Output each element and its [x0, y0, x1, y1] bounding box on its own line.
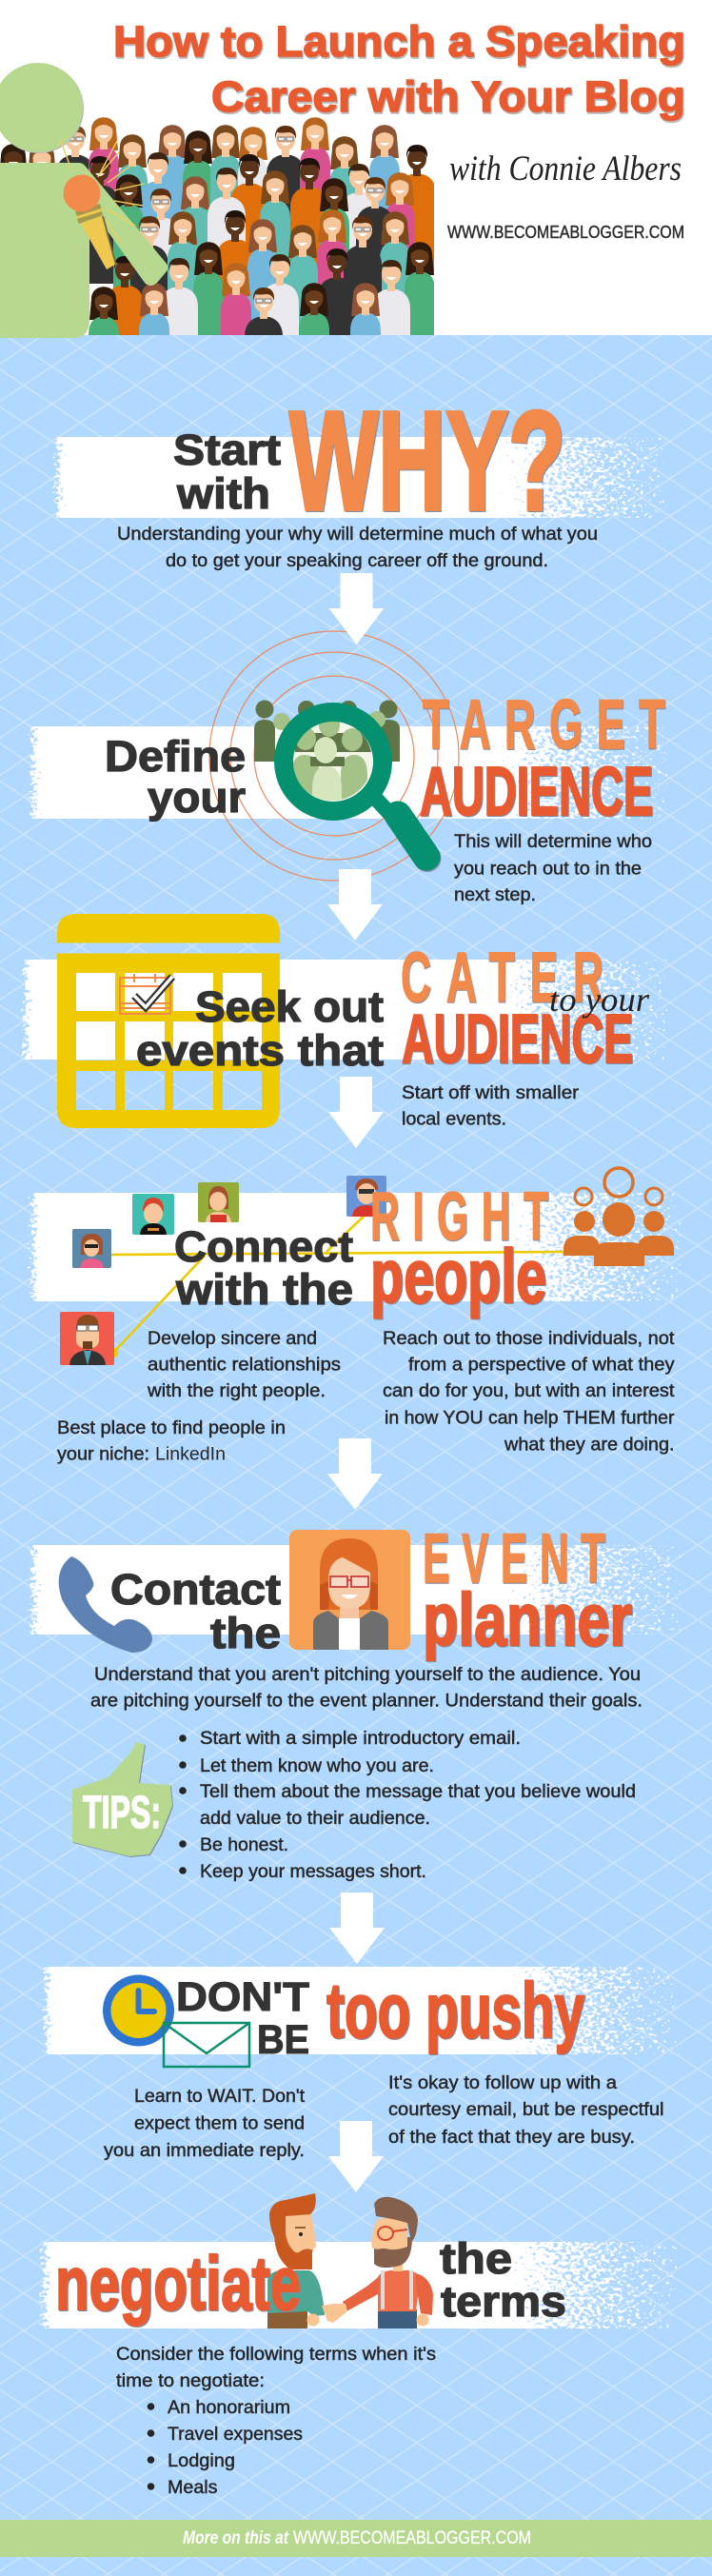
section 6 left text — [104, 2087, 306, 2161]
negotiation terms list: Travel expenses — [168, 2425, 303, 2445]
section 4 right text: in how YOU can help THEM further — [385, 1409, 675, 1428]
website: WWW.BECOMEABLOGGER.COM — [447, 223, 684, 242]
event planner portrait — [289, 1530, 410, 1650]
speaker silhouette with microphone — [0, 63, 168, 338]
section 4 niche text — [57, 1418, 286, 1464]
section 3 text: local events. — [402, 1110, 506, 1129]
section 3 text — [402, 1083, 580, 1129]
heading: the terms: terms — [441, 2277, 566, 2326]
negotiation terms list — [148, 2398, 303, 2498]
section 4 left text: authentic relationships — [148, 1356, 341, 1375]
arrow 3 — [328, 1077, 384, 1148]
heading: don't be: DON'T — [176, 1974, 309, 2020]
heading: connect with the: with the — [175, 1265, 353, 1314]
icon: clock — [103, 1974, 174, 2047]
section 4 niche text: Best place to find people in — [57, 1418, 286, 1438]
section 7 text: time to negotiate: — [116, 2371, 265, 2391]
heading: contact the: the — [210, 1609, 281, 1657]
script: to your: to your — [549, 981, 650, 1019]
section 6 left text: you an immediate reply. — [104, 2141, 305, 2161]
heading: connect with the — [174, 1222, 353, 1314]
section 5 text: are pitching yourself to the event planner. Understand their goals. — [90, 1691, 643, 1712]
connection lines — [103, 1210, 564, 1357]
icon: telephone — [59, 1556, 152, 1653]
heading: define your — [105, 732, 246, 822]
calendar icon — [57, 914, 280, 1128]
section 4 left text: Develop sincere and — [148, 1329, 317, 1349]
arrow 2 — [327, 869, 383, 941]
negotiation terms list: Lodging — [168, 2451, 235, 2471]
heading: define your: Define — [105, 732, 246, 781]
section 6 left text: expect them to send — [134, 2113, 305, 2134]
heading: EVENT: EVENT — [423, 1519, 605, 1597]
heading: contact the — [110, 1565, 281, 1657]
section 3 banner — [20, 960, 667, 1060]
magnifier over audience — [254, 701, 427, 859]
illustration: two men shaking hands — [267, 2193, 433, 2328]
icon: group of people — [564, 1168, 674, 1266]
section 4 left text: with the right people. — [147, 1381, 326, 1401]
heading: start with: Start — [173, 426, 281, 474]
thumbs-up tips icon — [72, 1742, 172, 1856]
heading: RIGHT: RIGHT — [370, 1179, 548, 1255]
section 4 right text — [383, 1329, 675, 1455]
heading: contact the: Contact — [110, 1565, 281, 1614]
title: How to Launch a Speaking — [113, 17, 685, 66]
section 4 right text: what they are doing. — [504, 1436, 674, 1455]
crowd illustration — [0, 117, 434, 335]
avatar: red-haired man — [132, 1194, 174, 1235]
heading: planner: planner — [423, 1577, 632, 1661]
target rings — [209, 631, 459, 881]
thumbs-up tips icon: TIPS: — [83, 1788, 161, 1838]
arrow 6 — [328, 2121, 384, 2192]
section 6 right text: courtesy email, but be respectful — [388, 2100, 664, 2120]
section 4 right text: Reach out to those individuals, not — [383, 1329, 675, 1349]
section 1 banner — [52, 437, 667, 518]
section 3 text: Start off with smaller — [402, 1083, 580, 1103]
heading: negotiate: negotiate — [55, 2241, 301, 2326]
tips list — [179, 1729, 636, 1882]
section 2 text: next step. — [454, 885, 536, 905]
avatar: man with sunglasses — [346, 1176, 386, 1217]
section 4 banner — [28, 1193, 681, 1301]
heading: WHY?: WHY? — [289, 383, 565, 540]
footer band: WWW.BECOMEABLOGGER.COM — [293, 2527, 531, 2548]
section 5 text: Understand that you aren't pitching yourself to the audience. You — [94, 1665, 641, 1685]
section 6 right text: It's okay to follow up with a — [388, 2073, 617, 2093]
section 7 banner — [39, 2242, 677, 2328]
section 4 right text: can do for you, but with an interest — [383, 1381, 675, 1401]
white header background — [0, 0, 712, 335]
arrow 1 — [329, 573, 385, 644]
avatar: man with goatee — [60, 1312, 114, 1365]
tips list: add value to their audience. — [200, 1809, 430, 1829]
title: Career with Your Blog — [211, 72, 685, 121]
negotiation terms list: An honorarium — [168, 2398, 290, 2418]
avatar: woman with sunglasses — [72, 1229, 111, 1268]
arrow 4 — [327, 1438, 383, 1510]
heading: connect with the: Connect — [174, 1222, 353, 1271]
tips list: Tell them about the message that you believe would — [200, 1782, 636, 1802]
section 2 text: you reach out to in the — [454, 859, 642, 880]
icon: envelope — [164, 2023, 249, 2067]
heading: CATER: CATER — [401, 938, 603, 1017]
section 2 text: This will determine who — [454, 832, 652, 852]
heading: seek out events that: events that — [136, 1026, 384, 1075]
section 5 text — [90, 1665, 643, 1712]
heading: too pushy: too pushy — [326, 1968, 584, 2054]
heading: the terms — [440, 2234, 566, 2326]
arrow 5 — [329, 1892, 385, 1964]
heading: seek out events that: Seek out — [195, 982, 384, 1031]
footer band: More on this at — [183, 2527, 289, 2548]
section 5 banner — [28, 1545, 681, 1635]
tips list: Be honest. — [200, 1835, 288, 1855]
section 6 left text: Learn to WAIT. Don't — [134, 2087, 306, 2107]
tips list: Let them know who you are. — [200, 1756, 434, 1776]
tips list: Keep your messages short. — [200, 1862, 426, 1882]
heading: start with — [173, 426, 281, 518]
section 1 text — [117, 525, 598, 571]
heading: don't be: BE — [257, 2017, 309, 2063]
section 6 right text — [388, 2073, 664, 2148]
section 7 text — [116, 2345, 436, 2391]
tips list: Start with a simple introductory email. — [200, 1729, 521, 1749]
heading: seek out events that — [136, 982, 384, 1075]
negotiation terms list: Meals — [168, 2478, 217, 2498]
heading: TARGET: TARGET — [423, 685, 665, 763]
section 6 right text: of the fact that they are busy. — [388, 2128, 635, 2148]
section 1 text: do to get your speaking career off the ground. — [166, 551, 548, 571]
footer band — [0, 2520, 712, 2557]
avatar: woman with pigtails — [198, 1182, 239, 1222]
heading: the terms: the — [440, 2234, 512, 2283]
heading: don't be — [176, 1974, 309, 2063]
section 4 niche text: LinkedIn — [155, 1445, 226, 1464]
section 6 banner — [41, 1967, 677, 2054]
title — [113, 17, 685, 121]
heading: people: people — [370, 1234, 546, 1318]
section 2 text — [454, 832, 652, 905]
heading: start with: with — [176, 469, 270, 518]
section 4 left text — [147, 1329, 341, 1401]
section 7 text: Consider the following terms when it's — [116, 2345, 436, 2365]
section 1 text: Understanding your why will determine much of what you — [117, 525, 598, 545]
section 4 niche text: your niche: — [57, 1445, 149, 1464]
section 2 banner — [28, 726, 667, 819]
heading: define your: your — [148, 773, 246, 822]
section 4 right text: from a perspective of what they — [408, 1356, 675, 1375]
